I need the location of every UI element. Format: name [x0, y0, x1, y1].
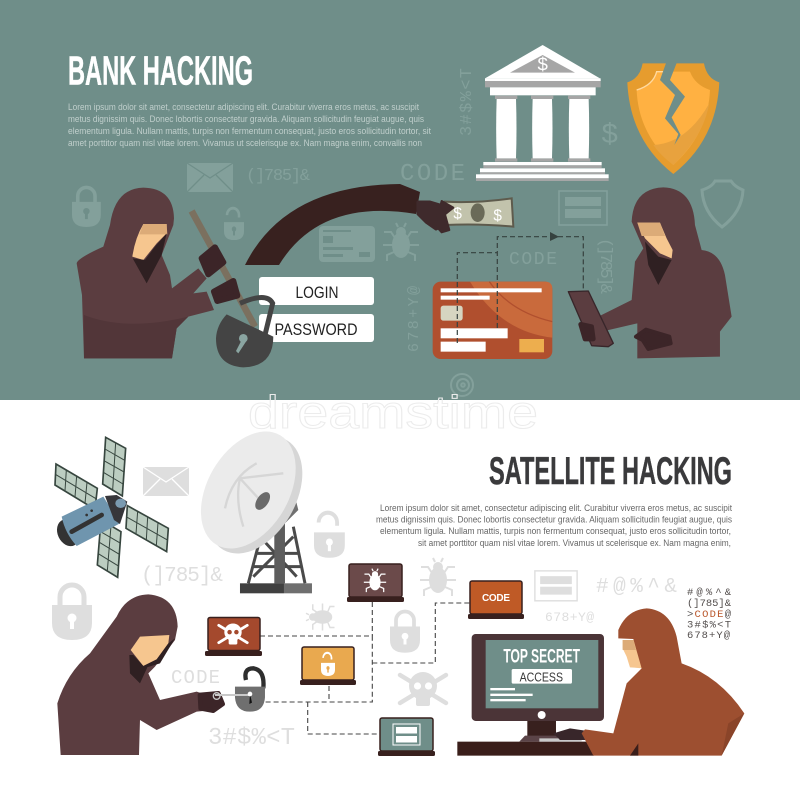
- button: login: LOGIN: [296, 283, 338, 302]
- background symbols: bank panel: CODE: [509, 250, 557, 270]
- icon: banknote: [435, 198, 513, 232]
- background symbols: bank panel: 678+Y@: [406, 286, 423, 352]
- text block: bank hacking description: amet porttitor quam nisl vitae lorem. Vivamus ut scelerisque ex. Nam magna enim, convallis non: [68, 138, 422, 148]
- background symbols: satellite panel: (]785]&: [141, 565, 223, 588]
- figure: hacker with tablet: [568, 187, 732, 358]
- figure: hacker with key and lock: [57, 594, 265, 755]
- background symbols: satellite panel: 3#$%<T: [208, 725, 295, 752]
- icon: bank building: [476, 45, 609, 181]
- icon: desktop monitor top secret: ACCESS: [520, 670, 563, 684]
- button: password: [259, 314, 374, 342]
- background symbols: bank panel: (]785]&: [246, 167, 310, 186]
- text block: satellite hacking description: sit amet porttitor quam nisl vitae lorem. Vivamus ut scelerisque ex. Nam magna enim,: [418, 538, 731, 548]
- background symbols: satellite panel: CODE: [171, 667, 220, 689]
- text block: code list: 3#$%<T: [687, 620, 731, 632]
- icon: banknote: $: [493, 208, 502, 225]
- icon: laptop with form: [378, 718, 435, 756]
- text block: bank hacking description: elementum ligula. Nullam mattis, turpis non fermentum consequat, justo eros sollicitudin tortor, sit: [68, 126, 432, 136]
- icon: laptop with skull: [205, 618, 262, 656]
- icon: laptop with code: [468, 581, 524, 619]
- icon: laptop with open lock: [300, 647, 356, 685]
- background spiral: [451, 374, 473, 396]
- arrow: dark arc with hand: [245, 184, 450, 265]
- icon: desktop monitor top secret: [457, 634, 604, 756]
- text block: code list: (]785]&: [687, 598, 732, 610]
- background symbols: bank panel: (]785]&: [595, 238, 614, 294]
- figure: hacker at computer: [582, 608, 744, 756]
- background symbols: satellite panel: [52, 467, 677, 752]
- icon: credit card: [433, 282, 552, 359]
- panel: satellite hacking: [0, 386, 800, 800]
- icon: banknote: $: [453, 205, 462, 222]
- watermark: dreamstime: [248, 386, 538, 438]
- background symbols: bank panel: CODE: [400, 161, 465, 188]
- heading: bank hacking: BANK HACKING: [68, 48, 253, 94]
- text block: bank hacking description: [68, 102, 432, 148]
- background symbols: bank panel: 3#$%<T: [458, 68, 477, 136]
- icon: laptop with bug: [347, 564, 404, 602]
- text block: bank hacking description: Lorem ipsum dolor sit amet, consectetur adipiscing elit. Curabitur viverra eros metus, ac suscipit: [68, 102, 420, 112]
- text block: satellite hacking description: metus dignissim quis. Donec lobortis consectetur gravida. Aliquam sollicitudin feugiat augue, quis: [376, 514, 733, 524]
- background symbols: satellite panel: #@%^&: [596, 576, 677, 599]
- text block: code list: >CODE@: [687, 609, 732, 621]
- icon: satellite dish tower: [181, 415, 322, 593]
- label: password text: PASSWORD: [274, 320, 358, 339]
- background symbols: satellite panel: 678+Y@: [545, 610, 594, 625]
- icon: satellite: [53, 437, 168, 577]
- icon: laptop with code: CODE: [482, 593, 510, 604]
- background shield: [702, 181, 743, 227]
- text block: satellite hacking description: elementum ligula. Nullam mattis, turpis non fermentum consequat, justo eros sollicitudin tortor,: [380, 526, 731, 536]
- text block: satellite hacking description: [376, 503, 733, 548]
- background symbols: bank panel: $: [601, 119, 618, 152]
- text block: code list: 678+Y@: [687, 630, 731, 642]
- background symbols: bank panel: [72, 68, 743, 396]
- icon: broken shield: [627, 61, 719, 174]
- background card: [319, 226, 375, 262]
- panel: bank hacking: [0, 0, 800, 400]
- button: login: [259, 277, 374, 305]
- text block: satellite hacking description: Lorem ipsum dolor sit amet, consectetur adipiscing elit. Curabitur viverra eros metus, ac suscipit: [380, 503, 733, 513]
- figure: hacker with crowbar: [77, 188, 273, 367]
- arrow: dashed network connections: [260, 602, 470, 734]
- text block: code list: [687, 587, 732, 642]
- icon: bank building: $: [537, 54, 548, 75]
- arrow: dashed data path: [457, 232, 583, 343]
- text block: code list: #@%^&: [687, 587, 732, 599]
- icon: desktop monitor top secret: TOP SECRET: [503, 647, 580, 668]
- text block: bank hacking description: metus dignissim quis. Donec lobortis consectetur gravida. Aliquam sollicitudin feugiat augue, quis: [68, 114, 425, 124]
